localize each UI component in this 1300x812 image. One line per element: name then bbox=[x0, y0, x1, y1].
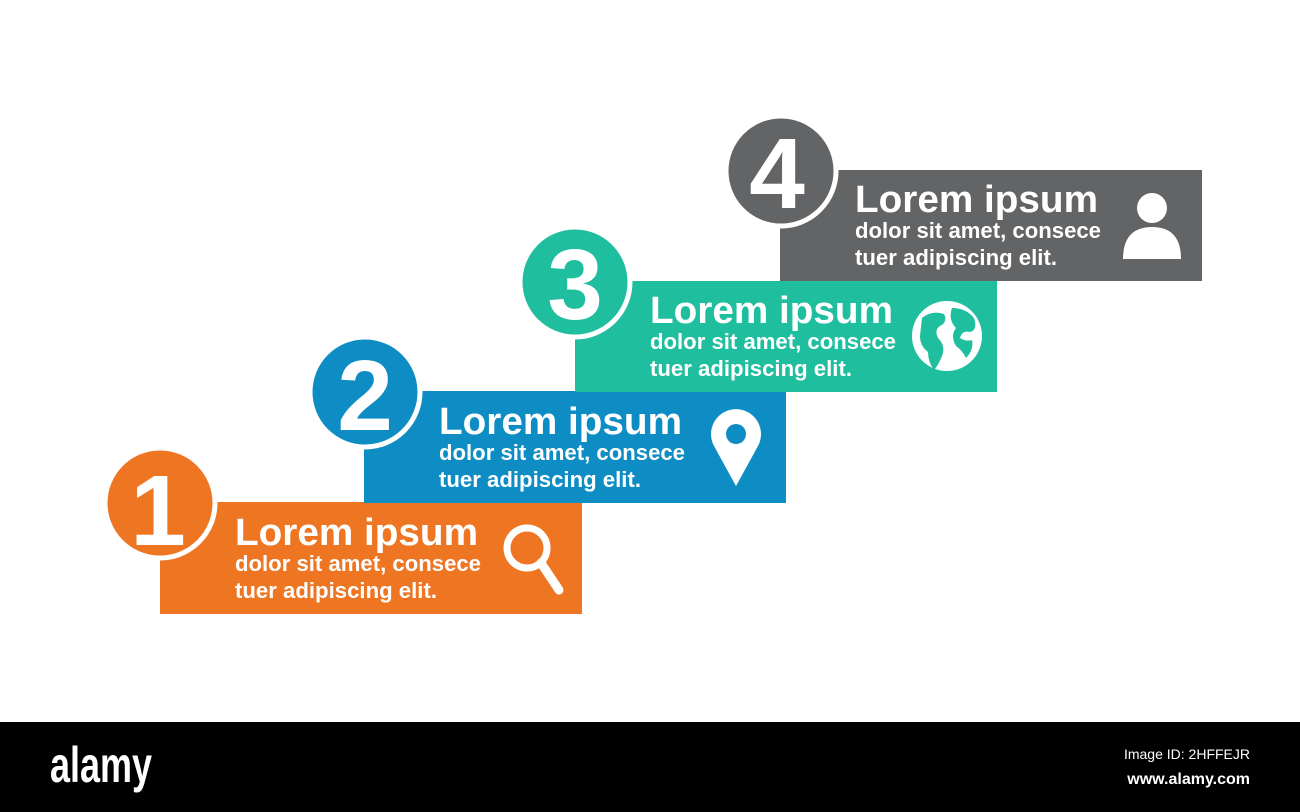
text: step 2: tuer adipiscing elit. bbox=[439, 467, 641, 492]
panel: step 2 box bbox=[364, 391, 786, 503]
text: step 1: Lorem ipsum bbox=[235, 512, 478, 554]
badge: number 4: 4 bbox=[749, 118, 805, 230]
step 4 bbox=[726, 116, 1202, 281]
logo: alamy: alamy bbox=[50, 737, 152, 793]
text: step 3: dolor sit amet, consece bbox=[650, 329, 896, 354]
text: url: www.alamy.com bbox=[1126, 771, 1250, 788]
text: step 3 bbox=[650, 290, 896, 381]
text: step 4 bbox=[855, 179, 1101, 270]
badge: number 2 bbox=[310, 337, 420, 452]
text: step 2: Lorem ipsum bbox=[439, 401, 682, 443]
badge: number 3 bbox=[520, 227, 630, 341]
text: step 4: dolor sit amet, consece bbox=[855, 218, 1101, 243]
panel: step 1 box bbox=[160, 502, 582, 614]
badge: number 3: 3 bbox=[547, 229, 603, 341]
step 2 bbox=[310, 337, 786, 503]
panel: step 4 box bbox=[780, 170, 1202, 281]
text: step 4: tuer adipiscing elit. bbox=[855, 245, 1057, 270]
text: step 2 bbox=[439, 401, 685, 492]
icon: person bbox=[1123, 193, 1181, 259]
footer bar bbox=[0, 722, 1300, 812]
badge: number 2: 2 bbox=[337, 340, 393, 452]
badge: number 1 bbox=[105, 448, 215, 567]
panel: step 3 box bbox=[575, 281, 997, 392]
text: step 4: Lorem ipsum bbox=[855, 179, 1098, 221]
badge: number 4 bbox=[726, 116, 836, 230]
icon: map pin bbox=[711, 409, 761, 486]
text: step 3: Lorem ipsum bbox=[650, 290, 893, 332]
text: step 2: dolor sit amet, consece bbox=[439, 440, 685, 465]
text: step 3: tuer adipiscing elit. bbox=[650, 356, 852, 381]
badge: number 1: 1 bbox=[130, 455, 186, 567]
icon: magnifier bbox=[507, 528, 559, 590]
step 3 bbox=[520, 227, 997, 392]
text: step 1 bbox=[235, 512, 481, 603]
step 1 bbox=[105, 448, 582, 614]
text: image id: Image ID: 2HFFEJR bbox=[1124, 746, 1250, 762]
text: step 1: dolor sit amet, consece bbox=[235, 551, 481, 576]
text: step 1: tuer adipiscing elit. bbox=[235, 578, 437, 603]
icon: globe bbox=[912, 301, 982, 371]
